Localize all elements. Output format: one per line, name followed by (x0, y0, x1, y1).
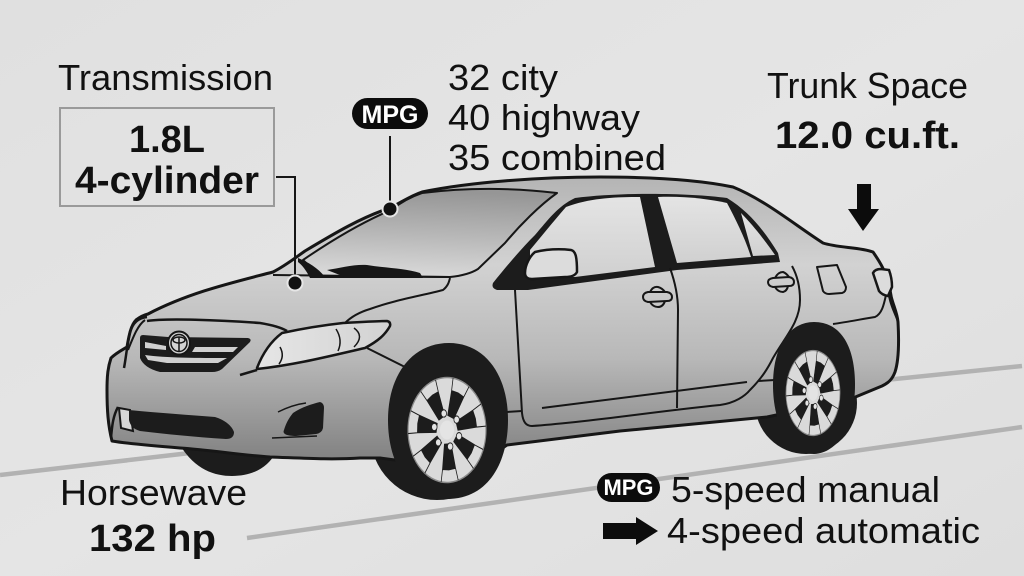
quarter window (741, 213, 775, 256)
car illustration (107, 177, 899, 500)
MPG figures: 35 combined (448, 137, 666, 178)
rear door handle (768, 272, 794, 292)
horsepower (60, 472, 247, 560)
rear wheel rim (782, 343, 846, 445)
engine box (60, 108, 274, 206)
side mirror (525, 249, 577, 279)
front wheel rim (402, 369, 495, 494)
trunk space (767, 65, 968, 157)
road lines (0, 366, 1022, 538)
MPG badge (352, 98, 428, 129)
rear and front tires (180, 352, 857, 500)
MPG figures (448, 57, 666, 178)
engine box: 1.8L (129, 119, 205, 161)
door lines (507, 266, 898, 426)
fuel door (817, 265, 846, 294)
MPG figures: 32 city (448, 57, 558, 98)
black window frame (492, 194, 780, 290)
toyota emblem (168, 332, 190, 354)
front door window (530, 197, 655, 277)
automatic arrow (603, 517, 658, 545)
grille (140, 335, 251, 372)
horsepower: 132 hp (89, 518, 216, 560)
hood and fender lines (124, 278, 450, 375)
MPG badge small (597, 473, 660, 502)
tail light (873, 269, 892, 296)
MPG callout connector (382, 136, 398, 216)
trunk space: Trunk Space (767, 65, 968, 106)
heading: transmission: Transmission (58, 57, 273, 98)
transmission options: 4-speed automatic (667, 510, 980, 551)
right fog lamp (272, 402, 324, 438)
rear door window (658, 197, 751, 263)
horsepower: Horsewave (60, 472, 247, 513)
MPG figures: 40 highway (448, 97, 640, 138)
wipers (298, 258, 423, 278)
engine box: 4-cylinder (75, 160, 259, 202)
MPG badge small: MPG (604, 475, 654, 500)
rear wheel arch and tire (773, 322, 855, 454)
transmission options (667, 469, 980, 551)
headlight (257, 321, 390, 369)
transmission options: 5-speed manual (671, 469, 940, 510)
front wheel arch and tire (388, 343, 508, 499)
hood base line (273, 275, 450, 277)
trunk space: 12.0 cu.ft. (775, 115, 960, 157)
front door handle (643, 287, 672, 307)
trunk arrow (848, 184, 879, 231)
MPG badge: MPG (362, 101, 418, 129)
windshield (303, 189, 557, 277)
left fog lamp (111, 407, 234, 439)
engine callout connector (276, 177, 302, 290)
car body (107, 177, 899, 470)
